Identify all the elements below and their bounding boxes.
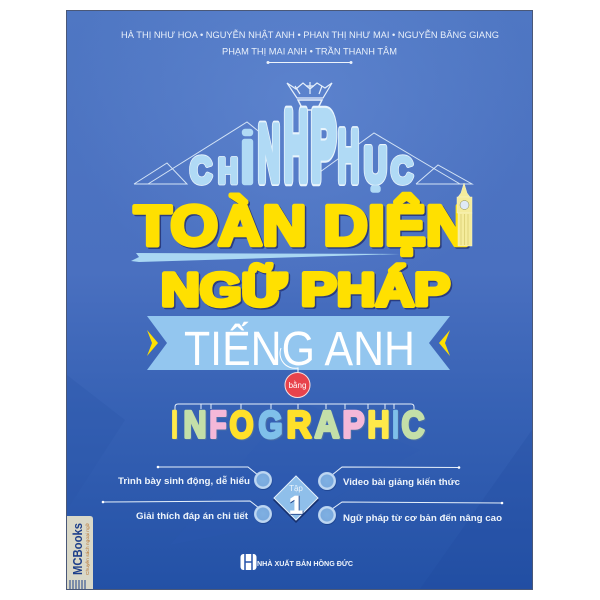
letter shadow layer [172,406,426,448]
text: authors: HÀ THỊ NHƯ HOA • NGUYỄN NHẬT ANH • PHAN THỊ NHƯ MAI • NGUYỄN BĂNG GIANG [121,29,499,40]
heading outline layer: H [284,91,308,201]
publisher logo and name [240,554,353,570]
heading outline layer: C [391,149,413,191]
letter colour layer: I [392,404,398,446]
letter shadow layer: G [260,406,284,448]
heading outline layer: H [218,151,238,191]
feature: Trình bày sinh động [118,466,272,490]
heading fill layer: N [258,110,280,197]
MCBooks spine tab [67,516,93,589]
letter colour layer [172,404,424,446]
text: TIẾNG ANH: TIẾNG ANH [184,322,415,376]
letter colour layer: H [368,404,390,446]
letter colour layer: P [342,404,364,446]
panel: cover background [66,10,532,590]
letter shadow layer: C [402,406,426,448]
arrow streak [131,253,400,262]
MCBooks spine tab: MCBooks [70,523,85,575]
letter shadow layer: N [184,406,208,448]
heading: CHINH PHỤC [190,91,413,201]
heading fill layer: P [311,91,336,201]
badge: Tập 1 diamond: Tập [289,484,303,493]
heading: TOÀN DIỆN: TOÀN DIỆN [136,194,472,260]
letter colour layer: F [210,404,226,446]
MCBooks spine tab: Chuyên sách ngoại ngữ [85,523,90,575]
feature: Giải thích đáp án [102,501,272,524]
letter shadow layer: I [394,406,400,448]
letter colour layer: N [184,404,206,446]
badge: Tập 1 diamond: 1 [289,492,303,520]
letter colour layer: G [258,404,282,446]
heading: NGỮ PHÁP: NGỮ PHÁP [161,264,450,316]
connector: bằng badge and rail: bằng [289,381,306,390]
badge: Tập 1 diamond: 1 [290,492,304,520]
letter colour layer: A [314,404,340,446]
letter shadow layer: I [172,406,178,448]
icon: right chevron [439,330,450,356]
heading fill layer: U [364,139,387,194]
heading fill layer: C [391,149,413,191]
letter colour layer: I [172,404,178,446]
feature: Video bài giảng: Video bài giảng kiến thức [343,477,460,488]
letter shadow layer: F [210,406,228,448]
letter shadow layer: P [344,406,366,448]
text: authors: PHẠM THỊ MAI ANH • TRẦN THANH TÂM [222,46,397,56]
letter colour layer: C [402,404,424,446]
heading: INFOGRAPHIC [172,404,426,448]
letter shadow layer: H [368,406,390,448]
connector: bằng badge and rail [175,348,414,410]
letter shadow layer: A [316,406,340,448]
heading: NGỮ PHÁP: NGỮ PHÁP [162,265,452,317]
text: authors [121,29,499,64]
ribbon: TIẾNG ANH [147,316,450,376]
heading outline layer: U [364,139,387,194]
heading: TOÀN DIỆN: TOÀN DIỆN [134,193,470,258]
publisher logo and name: NHÀ XUẤT BẢN HỒNG ĐỨC [257,558,353,568]
feature: Ngữ pháp từ cơ bản [318,502,503,525]
heading outline layer: H [338,116,359,197]
heading outline layer [190,91,413,201]
heading fill layer [190,91,413,201]
icon: crown [287,82,332,110]
heading fill layer: C [190,149,212,191]
heading outline layer: P [311,91,336,201]
heading outline layer: N [258,110,280,197]
heading fill layer: H [338,116,359,197]
letter colour layer: O [230,404,254,446]
icon: Big Ben tower [457,183,472,246]
letter shadow layer: O [230,406,254,448]
feature: Trình bày sinh động: Trình bày sinh động, dễ hiểu [118,476,250,487]
mountain outline decoration [134,122,472,184]
feature: Video bài giảng [318,466,460,491]
letter colour layer: R [286,404,312,446]
heading outline layer: C [190,149,212,191]
heading fill layer: H [218,151,238,191]
feature: Ngữ pháp từ cơ bản: Ngữ pháp từ cơ bản đến nâng cao [343,513,502,524]
icon: left chevron [147,330,158,356]
feature: Giải thích đáp án: Giải thích đáp án chi tiết [136,511,249,522]
badge: Tập 1 diamond [273,476,319,523]
letter shadow layer: R [288,406,312,448]
heading fill layer: H [284,91,308,201]
